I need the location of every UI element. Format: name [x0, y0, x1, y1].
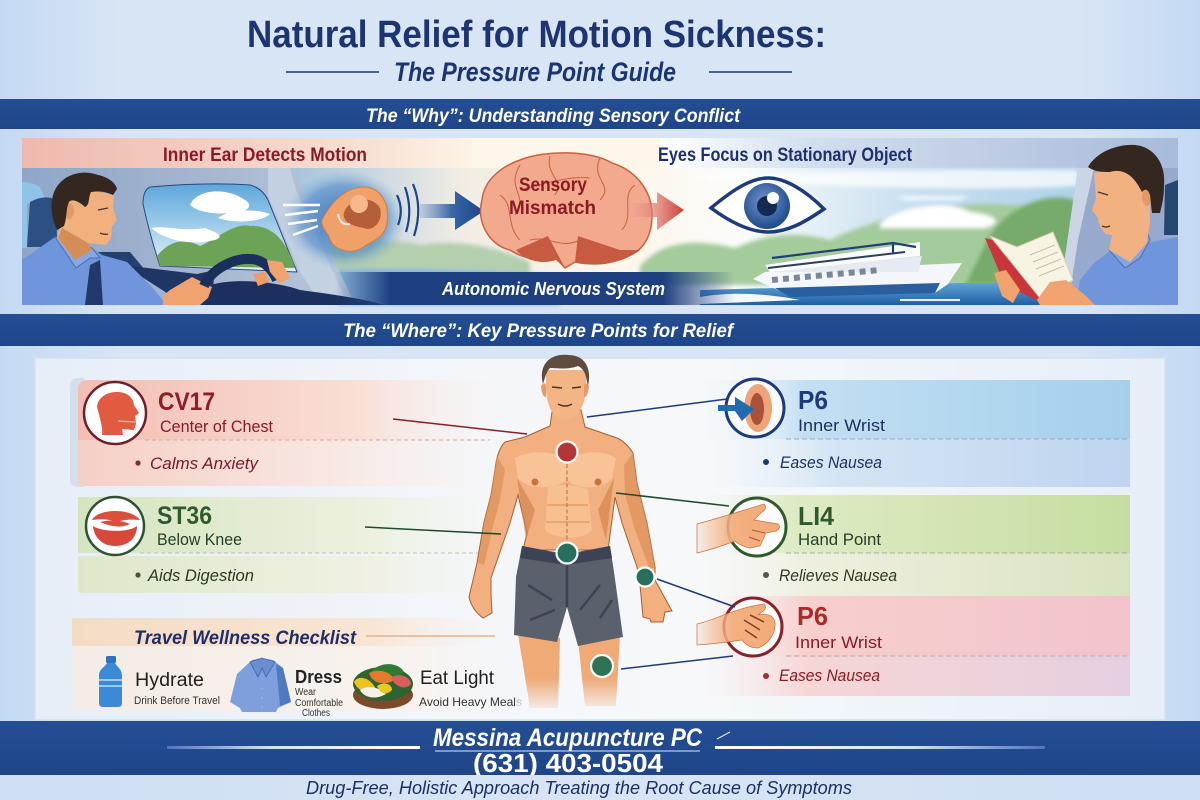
icon: head: [84, 382, 146, 444]
panel: travel wellness checklist: Dress: [295, 667, 342, 687]
reader: [985, 145, 1178, 305]
row: P6 blue: Inner Wrist: [798, 416, 885, 435]
tagline strip: [0, 775, 1200, 800]
icon: shirt: [230, 658, 291, 712]
row: ST36: ST36: [157, 502, 212, 530]
section banner: why: [0, 99, 1200, 129]
section banner: where: The “Where”: Key Pressure Points for Relief: [343, 321, 735, 342]
icon: stomach: [86, 497, 144, 555]
label: autonomic nervous system: Autonomic Nervous System: [441, 279, 665, 299]
label: inner ear: Inner Ear Detects Motion: [163, 145, 367, 166]
row: P6 blue: P6: [798, 385, 828, 415]
icon: ferry: [700, 242, 962, 304]
row: P6 red: P6: [797, 601, 828, 631]
hair: [1088, 145, 1164, 213]
panel: travel wellness checklist: [72, 618, 522, 719]
arrow: ear to brain: [420, 191, 484, 230]
row: ST36: [78, 497, 503, 593]
footer band: Messina Acupuncture PC: [433, 724, 703, 752]
row: ST36: Aids Digestion: [147, 566, 254, 585]
main title: Natural Relief for Motion Sickness:: [247, 14, 826, 56]
chest and abdomen shading: [515, 452, 616, 487]
torso shadow seat: [95, 252, 145, 300]
hair: [52, 173, 117, 230]
footer band: (631) 403-0504: [473, 748, 664, 778]
title block: [247, 14, 826, 87]
icon: water bottle: [99, 656, 122, 707]
car side window: [143, 184, 297, 272]
row: LI4 green: Hand Point: [798, 530, 881, 549]
icon: eye: [711, 178, 824, 232]
row: P6 red: [697, 596, 1130, 696]
seat: [27, 197, 57, 247]
dashed meridian: [566, 464, 568, 541]
panel: travel wellness checklist: Avoid Heavy Meals: [419, 695, 522, 709]
pressure point markers: [556, 442, 654, 677]
icon: ear: [322, 187, 388, 251]
body figure: [469, 355, 672, 718]
hair: [542, 355, 589, 386]
shirt: [22, 237, 165, 305]
row: CV17: Calms Anxiety: [150, 454, 259, 473]
row: P6 red: Inner Wrist: [795, 633, 882, 652]
icon: fist: [697, 598, 782, 656]
face features: [98, 208, 108, 234]
hands: [994, 270, 1020, 303]
shorts: [514, 546, 623, 646]
section banner: where: [0, 314, 1200, 346]
arm shading: [478, 453, 655, 570]
book: [985, 238, 1040, 300]
header strip left: [22, 138, 472, 168]
pillar: [268, 168, 348, 305]
panel: travel wellness checklist: Hydrate: [135, 670, 204, 691]
icon: brain: [480, 153, 652, 268]
checklist heading: Travel Wellness Checklist: [134, 628, 357, 649]
brain label: [509, 175, 596, 219]
rear side window: [22, 182, 45, 248]
dark door arm area: [123, 265, 215, 296]
window frame: [1063, 168, 1094, 285]
panel: pressure points: [35, 355, 1165, 720]
row: P6 blue: [700, 379, 1130, 487]
water right: [700, 283, 1178, 305]
icon: ear with arrow: [718, 379, 784, 437]
leader lines: [365, 399, 735, 669]
panel: sensory conflict scene: [22, 138, 1178, 305]
head: [546, 370, 586, 421]
leg fade: [515, 678, 625, 718]
icon: hand point: [697, 498, 786, 556]
brain label: Sensory: [519, 175, 587, 196]
row: P6 blue: Eases Nausea: [780, 453, 882, 472]
driver: [22, 173, 165, 305]
panel: travel wellness checklist: Drink Before Travel: [134, 695, 220, 707]
arrow: brain to eye: [629, 192, 684, 230]
car interior: left side: [22, 168, 385, 305]
row: LI4 green: [697, 495, 1130, 596]
row: CV17: [70, 378, 510, 487]
dashboard: [197, 281, 385, 305]
row: CV17: CV17: [158, 388, 215, 416]
facial features: [552, 387, 581, 406]
sound arcs: [397, 184, 418, 236]
torso and arms: [469, 410, 672, 622]
row: ST36: Below Knee: [157, 530, 242, 549]
label: eyes: Eyes Focus on Stationary Object: [658, 145, 913, 166]
panel: travel wellness checklist: Eat Light: [420, 668, 495, 689]
row: LI4 green: Relieves Nausea: [779, 566, 897, 585]
header strip right: [660, 138, 1178, 168]
middle landscape: [300, 170, 1078, 305]
brain label: Mismatch: [509, 198, 596, 219]
row: LI4 green: LI4: [798, 501, 835, 531]
steering wheel and hands: [163, 259, 290, 305]
section banner: why: The “Why”: Understanding Sensory Conflict: [366, 106, 741, 127]
icon: bowl of food: [353, 664, 413, 709]
row: CV17: Center of Chest: [160, 417, 273, 436]
ear: [64, 203, 74, 219]
footer band: [0, 721, 1200, 778]
subtitle: The Pressure Point Guide: [394, 57, 676, 87]
panel: travel wellness checklist: Clothes: [302, 708, 330, 719]
tagline strip: Drug-Free, Holistic Approach Treating the Root Cause of Symptoms: [306, 778, 852, 798]
neck and face: [57, 190, 117, 260]
face: [1092, 160, 1150, 262]
motion lines: [283, 205, 320, 235]
band: autonomic nervous system: [335, 272, 735, 305]
glow behind ear: [283, 170, 407, 270]
row: P6 red: Eases Nausea: [779, 666, 880, 685]
legs: [518, 634, 620, 708]
shirt: [1076, 237, 1178, 305]
panel: travel wellness checklist: Wear: [295, 687, 317, 698]
panel: travel wellness checklist: Comfortable: [295, 698, 343, 709]
